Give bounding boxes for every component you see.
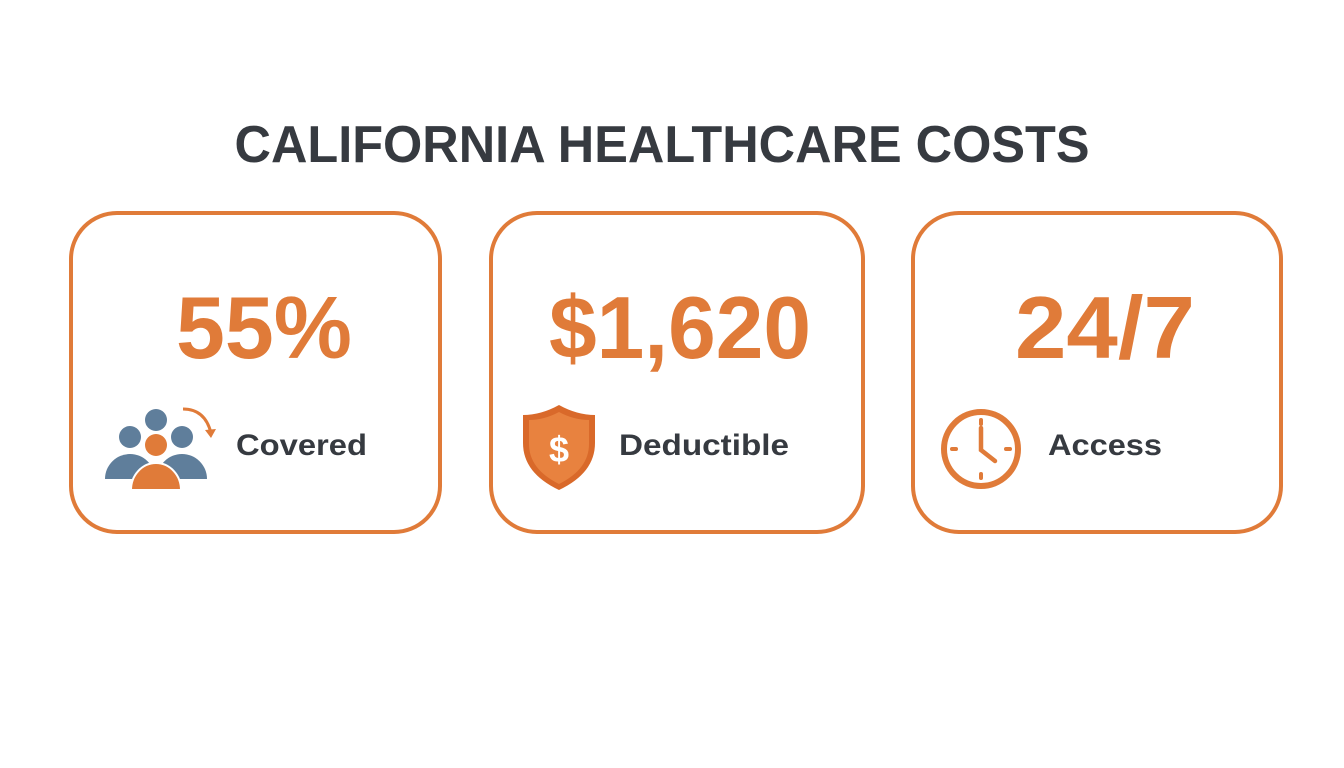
icon: people bbox=[105, 409, 216, 490]
icon: clock bbox=[944, 412, 1018, 486]
title: CALIFORNIA HEALTHCARE COSTS bbox=[234, 116, 1090, 174]
stat: 24/7: 24/7 bbox=[1015, 278, 1195, 377]
panel: access bbox=[913, 213, 1281, 532]
stat: 55%: 55% bbox=[176, 278, 352, 377]
label: access: Access bbox=[1048, 429, 1162, 462]
label: deductible: Deductible bbox=[619, 429, 789, 462]
icon: shield: $ bbox=[549, 429, 569, 470]
panel: covered bbox=[71, 213, 440, 532]
stat: $1,620: $1,620 bbox=[549, 278, 811, 377]
label: covered: Covered bbox=[236, 429, 367, 462]
icon: shield bbox=[523, 405, 595, 490]
panel: deductible bbox=[491, 213, 863, 532]
